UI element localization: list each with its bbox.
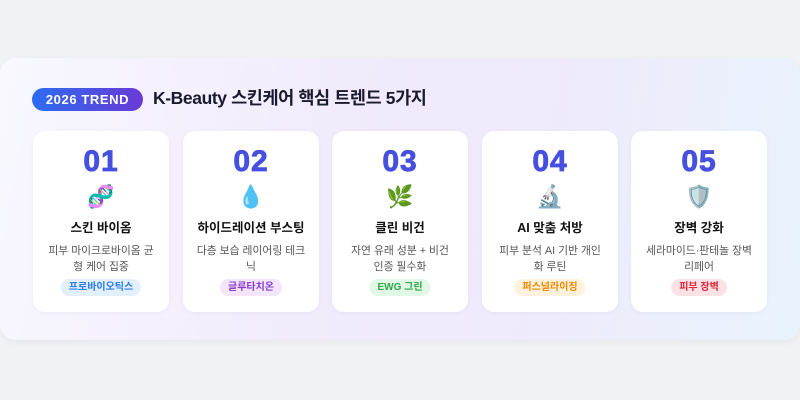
tag — [220, 279, 282, 296]
description: 인증 필수화 — [374, 261, 426, 273]
card 03 — [332, 131, 468, 312]
card title: 장벽 강화 — [674, 221, 724, 235]
card title: 클린 비건 — [375, 221, 425, 235]
card title: 하이드레이션 부스팅 — [198, 221, 304, 235]
card title: AI 맞춤 처방 — [517, 221, 583, 235]
description: 닉 — [246, 261, 256, 273]
tag — [514, 279, 586, 296]
description: 피부 마이크로바이옴 균 — [48, 245, 154, 257]
tag: 글루타치온 — [228, 282, 274, 293]
number: 03 — [382, 145, 418, 178]
panel: main container — [0, 58, 800, 340]
description: 다층 보습 레이어링 테크 — [197, 245, 305, 257]
icon: microscope: 🔬 — [536, 184, 564, 209]
card title: 스킨 바이옴 — [70, 221, 131, 235]
card 05 — [631, 131, 767, 312]
card 04 — [482, 131, 618, 312]
description — [351, 244, 449, 273]
icon: herb: 🌿 — [386, 184, 414, 209]
tag — [61, 279, 141, 296]
tag — [671, 279, 727, 296]
icon: water drop: 💧 — [237, 184, 265, 209]
description — [48, 244, 154, 273]
number: 02 — [233, 145, 269, 178]
badge: 2026 trend: 2026 TREND — [46, 92, 129, 107]
card 02 — [183, 131, 319, 312]
number: 05 — [681, 145, 717, 178]
description: 세라마이드·판테놀 장벽 — [646, 245, 752, 257]
description: 리페어 — [684, 261, 714, 273]
badge: 2026 trend — [32, 88, 143, 111]
number: 01 — [83, 145, 119, 178]
tag — [369, 279, 431, 296]
card 01 — [33, 131, 169, 312]
description: 피부 분석 AI 기반 개인 — [499, 245, 601, 257]
description: 화 루틴 — [534, 261, 566, 273]
icon: dna: 🧬 — [87, 184, 115, 209]
tag: 피부 장벽 — [679, 282, 719, 293]
tag: 퍼스널라이징 — [522, 282, 578, 293]
description — [499, 244, 601, 273]
description: 형 케어 집중 — [73, 261, 129, 273]
description — [646, 244, 752, 273]
number: 04 — [532, 145, 568, 178]
description — [197, 244, 305, 273]
tag: EWG 그린 — [377, 282, 423, 293]
tag: 프로바이오틱스 — [69, 282, 133, 293]
description: 자연 유래 성분 + 비건 — [351, 245, 449, 257]
icon: shield: 🛡️ — [685, 184, 713, 209]
title: K-Beauty 스킨케어 핵심 트렌드 5가지 — [153, 88, 426, 108]
